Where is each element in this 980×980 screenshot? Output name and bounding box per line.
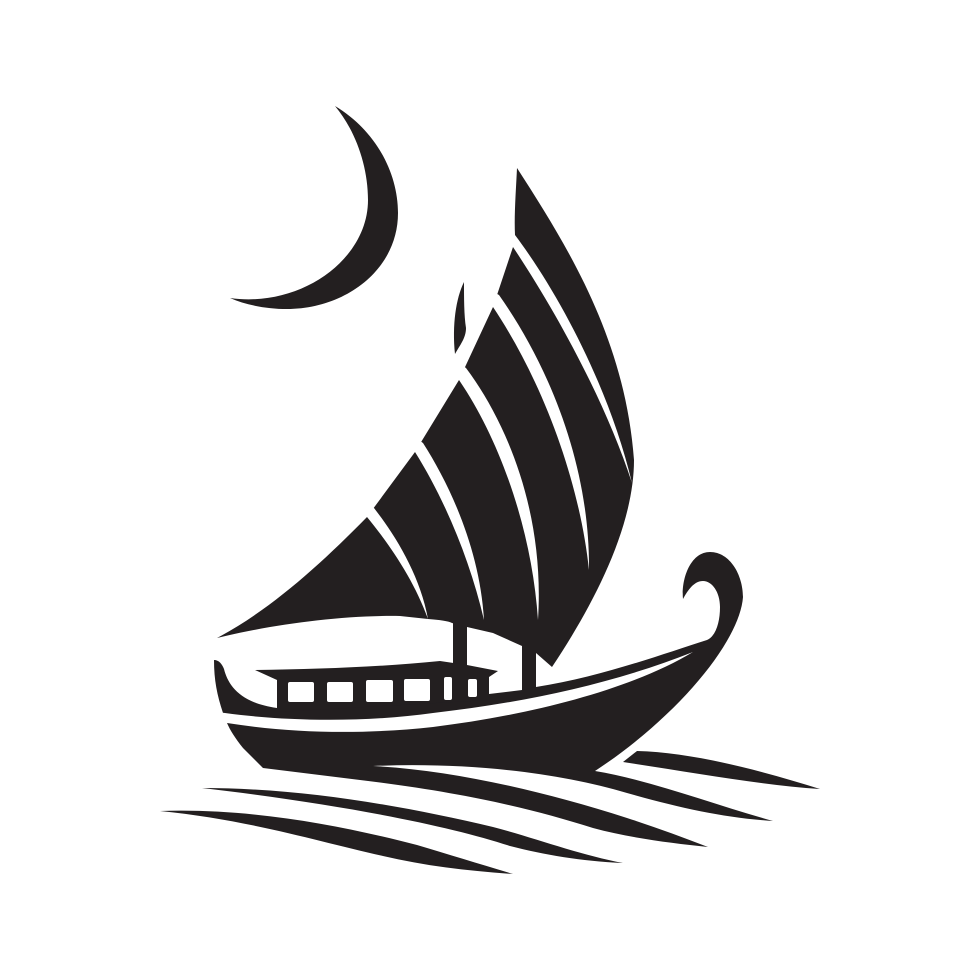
window 3 — [366, 680, 393, 702]
window 2 — [327, 682, 353, 702]
wave: detached right — [623, 751, 820, 789]
sail body — [217, 168, 634, 667]
window 4 — [404, 679, 430, 701]
window 6 — [468, 679, 477, 697]
wave: bottom left — [160, 811, 513, 874]
white gap between rail and hull — [216, 652, 693, 732]
sail with stripes — [217, 168, 634, 667]
icon: crescent moon — [230, 106, 398, 309]
window 5 — [444, 677, 452, 700]
sail stripe 2 — [486, 290, 589, 570]
wave: lower middle — [202, 788, 623, 863]
sail stripe 3 — [452, 362, 539, 620]
cabin with windows — [255, 661, 498, 712]
icon: pennant flame beside the sail — [454, 282, 466, 354]
boat hull with scrolled prow and two attached waves — [214, 552, 773, 847]
cabin body — [255, 661, 498, 712]
sail stripe 4 — [408, 438, 484, 620]
mast: front — [453, 620, 467, 672]
sail stripe 5 — [360, 503, 428, 619]
sail stripe 1 — [505, 232, 632, 483]
mast: rear — [522, 642, 536, 702]
window 1 — [288, 682, 314, 702]
